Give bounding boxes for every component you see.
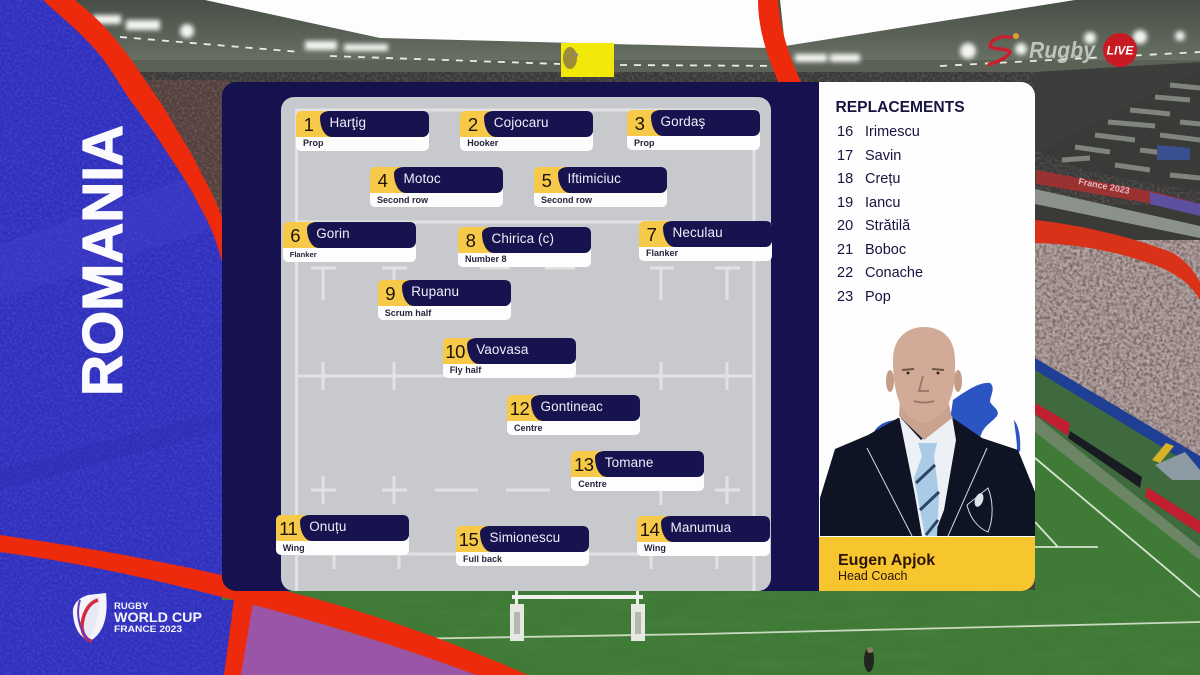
position: Centre <box>514 422 543 432</box>
number 3: 3 <box>635 113 644 134</box>
heading: replacements: REPLACEMENTS <box>836 99 965 116</box>
replacement 19: 19 <box>837 194 853 210</box>
replacement 23: 23 <box>837 288 853 304</box>
name Cojocaru: Cojocaru <box>494 114 549 130</box>
S logo mark <box>988 37 1012 65</box>
logo emblem <box>73 593 107 641</box>
replacement 16 <box>837 124 920 140</box>
player card 2 <box>460 110 593 150</box>
number 10: 10 <box>445 340 465 362</box>
white stadium roof <box>205 0 1075 48</box>
name Neculau <box>663 221 772 247</box>
player card 4 <box>370 167 503 207</box>
jacket badge <box>967 488 992 532</box>
name Gorin: Gorin <box>316 226 350 241</box>
number 13: 13 <box>574 454 594 475</box>
jacket <box>820 418 1035 536</box>
player card 10 <box>443 338 576 378</box>
blue paint splash <box>874 383 1020 452</box>
LIVE badge: LIVE <box>1107 44 1134 58</box>
name Gordaş: Gordaş <box>660 114 705 129</box>
replacement 18 <box>837 171 900 187</box>
position: Centre <box>578 478 607 488</box>
position: Flanker <box>646 248 678 258</box>
player card 14 <box>637 516 770 556</box>
number 12: 12 <box>510 398 529 419</box>
replacement 19: Iancu <box>865 194 900 210</box>
France 2023 banner and red band on the right: France 2023 <box>1078 176 1131 196</box>
name Iftimiciuc <box>558 167 667 193</box>
number 5: 5 <box>542 170 551 191</box>
position: Wing <box>283 542 305 552</box>
player card 15 <box>456 526 589 566</box>
coach name band <box>819 537 1035 591</box>
player card 6 <box>283 222 416 262</box>
replacement 22: Conache <box>865 265 923 281</box>
logo wordmark: RUGBY <box>114 601 149 612</box>
pitch diagram <box>281 97 771 591</box>
name Neculau: Neculau <box>672 225 723 240</box>
position: Full back <box>463 554 502 564</box>
referee on the pitch <box>864 647 874 672</box>
pitch markings <box>400 458 1200 639</box>
replacements list <box>837 124 923 304</box>
number 4: 4 <box>378 170 387 191</box>
name Simionescu <box>480 526 589 552</box>
name Tomane <box>595 451 704 477</box>
name Simionescu: Simionescu <box>490 530 560 545</box>
name Gontineac: Gontineac <box>540 399 603 414</box>
replacement 16: Irimescu <box>865 124 920 140</box>
name Iftimiciuc: Iftimiciuc <box>568 171 621 186</box>
red swooshes <box>0 0 805 675</box>
name Gorin <box>307 222 416 248</box>
coach role: Head Coach <box>838 569 908 583</box>
replacement 22 <box>837 265 923 281</box>
player card 12 <box>507 395 640 435</box>
number 1: 1 <box>304 114 313 134</box>
position: Number 8 <box>465 254 507 264</box>
rugby posts <box>510 591 645 641</box>
replacement 21: 21 <box>837 242 853 258</box>
tie <box>914 443 939 536</box>
replacement 22: 22 <box>837 265 853 281</box>
position: Fly half <box>450 365 481 375</box>
name Chirica <box>482 227 591 253</box>
replacement 23 <box>837 288 891 304</box>
number 2: 2 <box>468 114 478 134</box>
name Chirica: Chirica (c) <box>492 231 554 246</box>
player card 5 <box>534 167 667 207</box>
name Cojocaru <box>484 110 593 136</box>
name Onuțu: Onuțu <box>309 519 346 534</box>
panel: navy line-up backing <box>222 82 819 591</box>
Rugby World Cup France 2023 logo <box>73 593 202 641</box>
name Onuțu <box>300 515 409 541</box>
head <box>893 327 955 423</box>
position: Second row <box>541 195 592 205</box>
position: Scrum half <box>385 308 431 318</box>
logo wordmark: WORLD CUP <box>114 609 202 625</box>
player card 3 <box>627 110 760 150</box>
replacement 21: Boboc <box>865 242 906 258</box>
neck <box>899 400 952 440</box>
name Manumua <box>661 516 770 542</box>
title: ROMANIA: ROMANIA <box>71 125 135 396</box>
name Gontineac <box>531 395 640 421</box>
coach name: Eugen Apjok <box>838 552 935 569</box>
number 14: 14 <box>640 519 659 540</box>
position: Wing <box>644 543 666 553</box>
position: Second row <box>377 195 428 205</box>
name Rupanu <box>402 280 511 306</box>
player card 7 <box>639 221 772 261</box>
player card 13 <box>571 451 704 491</box>
position: Prop <box>303 138 324 148</box>
Rugby wordmark: Rugby <box>1029 37 1096 63</box>
replacement 18: Crețu <box>865 171 900 187</box>
replacement 23: Pop <box>865 288 891 304</box>
name Motoc: Motoc <box>404 171 441 186</box>
SuperSport Rugby logo <box>988 33 1096 65</box>
shirt <box>899 416 956 536</box>
replacement 19 <box>837 194 900 210</box>
logo wordmark: FRANCE 2023 <box>114 624 182 635</box>
coach portrait <box>820 327 1035 536</box>
name Vaovasa: Vaovasa <box>476 342 528 356</box>
position: Flanker <box>290 250 317 258</box>
ears <box>886 370 894 392</box>
name Vaovasa <box>467 338 576 364</box>
number 11: 11 <box>279 518 297 539</box>
number 9: 9 <box>385 283 395 304</box>
replacement 16: 16 <box>837 124 853 140</box>
eyes and brows <box>902 369 944 370</box>
player card 9 <box>378 280 511 320</box>
player card 8 <box>458 227 591 267</box>
name Tomane: Tomane <box>605 455 653 470</box>
position: Hooker <box>467 138 498 148</box>
name Motoc <box>394 167 503 193</box>
LIVE badge <box>1103 33 1137 67</box>
number 7: 7 <box>647 224 656 245</box>
floodlights and roof light strip <box>93 15 1200 66</box>
number 8: 8 <box>466 230 475 251</box>
name Manumua: Manumua <box>670 520 731 535</box>
number 15: 15 <box>459 529 478 550</box>
nose and mouth <box>914 376 934 402</box>
replacement 18: 18 <box>837 171 853 187</box>
replacement 17: Savin <box>865 148 901 164</box>
position: Prop <box>634 138 655 148</box>
pitch-side green strip and advertising boards <box>1035 358 1200 560</box>
France 2023 banner and red band on the right <box>1035 170 1200 300</box>
replacement 17: 17 <box>837 148 853 164</box>
name Harţig: Harţig <box>330 114 366 130</box>
player card 11 <box>276 515 409 555</box>
name Rupanu: Rupanu <box>411 284 459 299</box>
number 6: 6 <box>290 225 300 246</box>
replacement 21 <box>837 242 906 258</box>
panel: replacements white card <box>819 82 1035 537</box>
replacement 20 <box>837 218 910 234</box>
name Harţig <box>320 110 429 136</box>
replacement 17 <box>837 148 901 164</box>
replacement 20: 20 <box>837 218 853 234</box>
purple corner panel <box>236 604 476 675</box>
blue side panel <box>0 0 240 675</box>
orange dot <box>1013 33 1019 39</box>
yellow big screen <box>561 43 614 77</box>
pitch grass <box>0 430 1200 675</box>
name Gordaş <box>651 110 760 136</box>
jacket piping <box>867 448 987 536</box>
player card 1 <box>296 110 429 150</box>
logo wordmark <box>114 601 202 635</box>
replacement 20: Strătilă <box>865 218 910 234</box>
